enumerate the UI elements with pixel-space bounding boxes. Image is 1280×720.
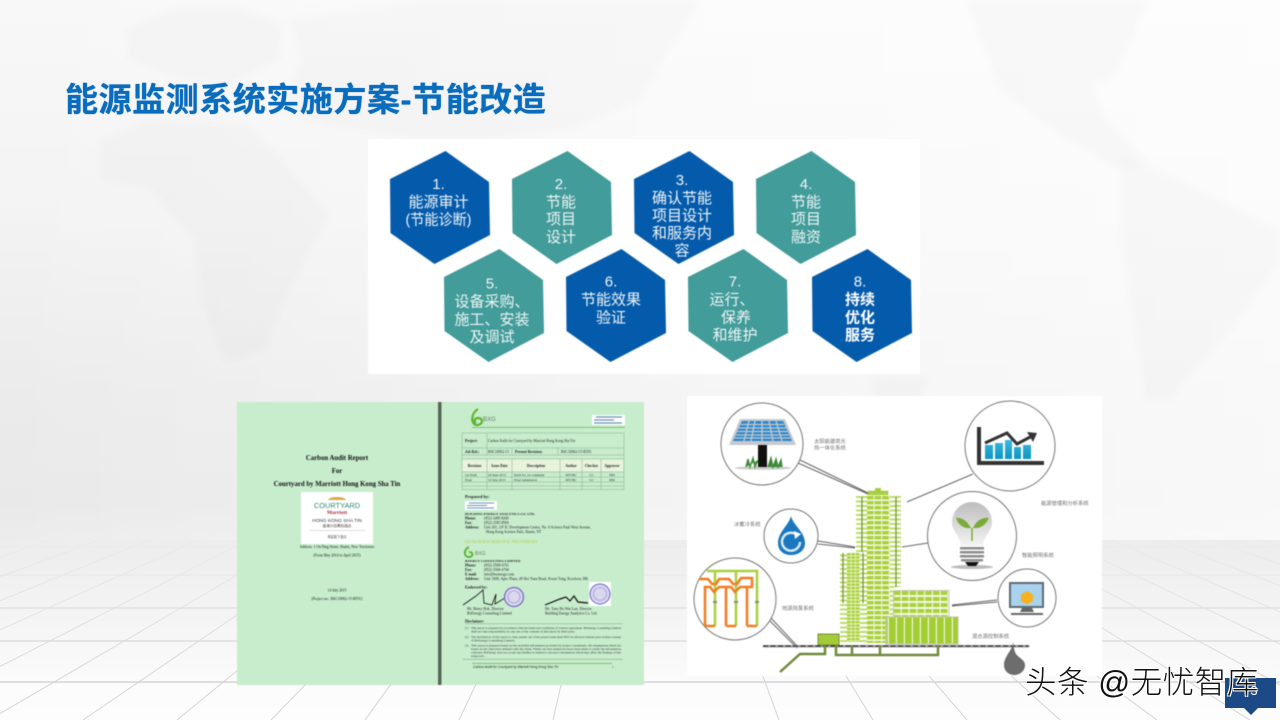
system labels: 冰蓄冷系统 <box>734 520 761 528</box>
endorsement signatures and stamps <box>463 582 611 616</box>
hotel logo: 萬豪旗下酒店 <box>327 534 347 539</box>
disclaimer text: based on the objectives defined with the client. While our best endeavors have been taken to verify the information <box>471 647 622 651</box>
report revision page <box>462 409 625 669</box>
disclaimer text: This report is prepared in accordance with the terms and conditions of contract agreement. BxEnergy Consulting Limited <box>471 626 622 630</box>
background: world map and perspective floor <box>0 306 1280 720</box>
hotel logo: HONG KONG SHA TIN <box>312 518 362 524</box>
step 2 hexagon: 节能 <box>546 194 576 211</box>
disclaimer text: This report is prepared based on the available information provided by project consultants. All assumptions listed are <box>471 644 622 648</box>
revision table: Approver <box>604 464 620 468</box>
system labels <box>734 437 1089 640</box>
disclaimer text: report. <box>471 654 486 658</box>
report page footer: Carbon Audit for Courtyard by Marriott Hong Kong Sha Tin <box>473 665 559 669</box>
revision table: Project: <box>465 439 478 443</box>
disclaimer text: collected, BxEnergy does not accept any liability in relation to incorrect information which may affect the findings of this <box>471 650 622 654</box>
step 8 hexagon: 优化 <box>845 308 875 326</box>
qualified service providers block: info@bxenergy.com <box>484 572 514 576</box>
step 7 hexagon: 保养 <box>721 310 751 326</box>
revision table: Draft for 1st comment <box>514 473 544 477</box>
step 3 hexagon: 3. <box>676 172 688 189</box>
step 7 hexagon: 运行、 <box>709 292 755 308</box>
prepared by block: BUILDING ENERGY ANALYTICS CO. LTD. <box>465 512 535 516</box>
disclaimer text: [3] <box>465 644 468 648</box>
prepared by block: Phone: <box>465 516 476 520</box>
step 5 hexagon: 5. <box>486 276 498 292</box>
step 1 hexagon: 能源审计 <box>408 194 469 211</box>
report cover page: Carbon Audit Report <box>306 455 369 462</box>
report cover page: 14 July 2015 <box>327 588 347 592</box>
step 1 hexagon: 1. <box>432 176 445 193</box>
revision table: BSC10062-15 <box>488 450 509 454</box>
step 8 hexagon <box>812 249 912 362</box>
report page footer <box>472 663 614 669</box>
qualified service providers block <box>465 539 589 582</box>
step 5 hexagon: 施工、安装 <box>454 312 530 328</box>
watermark: 头条 @无忧智库 <box>1025 664 1259 700</box>
revision table: Job Ref.: <box>465 450 479 454</box>
revision table: Issue Date <box>491 464 508 468</box>
step 6 hexagon: 6. <box>605 274 617 290</box>
BXG logo <box>472 409 496 425</box>
endorsement signatures and stamps: Building Energy Analytics Co. Ltd. <box>545 612 597 616</box>
revision table: 26 June 2015 <box>488 473 506 477</box>
icon: smart lighting bulb circle <box>928 492 1016 580</box>
connector lines <box>769 460 997 648</box>
revision table: MY/HC <box>565 478 577 482</box>
icon: solar panel circle <box>721 403 803 485</box>
step 2 hexagon: 2. <box>555 176 567 193</box>
qualified service providers block: Fax: <box>465 568 472 572</box>
endorsement signatures and stamps: Mr. Tony Ho Wai Lun, Director <box>545 607 592 612</box>
revision table: HM <box>609 473 615 477</box>
step 2 hexagon: 项目 <box>546 211 576 228</box>
step 5 hexagon <box>444 249 544 362</box>
step 6 hexagon: 验证 <box>596 310 626 326</box>
revision table: BSC10062-15-RT01 <box>561 450 592 454</box>
step 1 hexagon: (节能诊断) <box>406 212 472 228</box>
disclaimer text: Disclaimer: <box>465 620 484 624</box>
qualified service providers block: Unit 1608, Apec Plaza, 49 Hoi Yuen Road, Kwun Tong, Kowloon, HK <box>484 577 589 582</box>
prepared by block: Address: <box>465 526 479 530</box>
step 4 hexagon: 融资 <box>791 229 821 246</box>
step 7 hexagon: 和维护 <box>712 327 758 344</box>
icon: ice storage water drop circle <box>764 509 818 563</box>
disclaimer text: [2] <box>465 635 468 639</box>
step 5 hexagon: 设备采购、 <box>454 294 530 310</box>
revision table: Final submission <box>514 478 537 482</box>
disclaimer text <box>463 620 623 660</box>
endorsement signatures and stamps: Mr. Henry Hok, Director <box>467 607 505 612</box>
disclaimer text: The distribution of this report to other parties out of the project team shall NOT be allowed without prior written consent <box>471 635 621 639</box>
report cover page: (From May 2014 to April 2015) <box>313 554 361 558</box>
system labels: 混合源控制系统 <box>972 632 1010 640</box>
icon: gas flame <box>1004 642 1025 675</box>
step 2 hexagon <box>512 151 612 264</box>
qualified service providers block: Address: <box>465 577 479 581</box>
step 6 hexagon: 节能效果 <box>581 292 641 308</box>
system labels: 太阳能建筑光 <box>814 437 846 445</box>
step 3 hexagon: 容 <box>674 242 690 260</box>
revision table: 1st Draft <box>465 473 477 477</box>
step 2 hexagon: 设计 <box>546 229 576 246</box>
BXG logo: BXG <box>483 417 496 423</box>
revision table: Carbon Audit for Courtyard by Marriott Hong Kong Sha Tin <box>488 439 575 443</box>
report cover page: For <box>332 468 342 475</box>
icon: mixed source monitor circle <box>998 569 1056 627</box>
endorsement signatures and stamps: BxEnergy Consulting Limited <box>467 612 512 616</box>
report cover page: Courtyard by Marriott Hong Kong Sha Tin <box>274 481 401 488</box>
hotel logo: 香港沙田萬怡酒店 <box>323 523 352 529</box>
step 4 hexagon: 节能 <box>791 194 821 211</box>
revision table: Description <box>527 464 545 468</box>
step 8 hexagon: 服务 <box>845 326 875 344</box>
revision table: Checker <box>585 464 599 468</box>
revision table: Revision <box>468 464 481 468</box>
qualified service providers block: BXERGY CONSULTING LIMITED <box>465 559 521 563</box>
system labels: 能源管理和分析系统 <box>1041 499 1089 507</box>
step 3 hexagon: 确认节能 <box>652 190 712 207</box>
qualified service providers block: (852) 3568-4704 <box>484 568 509 572</box>
disclaimer text: shall not take responsibility for any use of the contents of this report by third party. <box>471 630 575 634</box>
prepared by block <box>465 494 591 535</box>
step 7 hexagon: 7. <box>729 274 741 290</box>
prepared by block: (852) 3585 8569 <box>484 521 509 525</box>
prepared by block: (852) 3489 8200 <box>484 516 509 520</box>
step 6 hexagon <box>566 249 666 362</box>
page number badge: 3 <box>1250 683 1258 698</box>
step 8 hexagon: 持续 <box>845 292 875 308</box>
step 5 hexagon: 及调试 <box>469 329 515 346</box>
qualified service providers block: (852) 3568-4701 <box>484 564 509 568</box>
hotel logo <box>301 492 373 544</box>
revision table: Final <box>465 478 472 482</box>
step 3 hexagon: 项目设计 <box>652 208 712 224</box>
report page footer: 1 <box>612 665 614 669</box>
prepared by block: Prepared by: <box>465 494 490 499</box>
qualified service providers block: BXG <box>475 551 486 557</box>
disclaimer text: [1] <box>465 626 468 630</box>
revision table: Present Revision: <box>515 450 542 454</box>
system labels: 地源热泵系统 <box>782 604 814 612</box>
endorsement signatures and stamps: Endorsed by: <box>465 586 487 590</box>
step 7 hexagon <box>688 249 788 362</box>
step 4 hexagon: 4. <box>800 176 812 193</box>
report cover page: [Project no.: BSC10062-15-RT01] <box>312 597 362 601</box>
qualified service providers block: Phone: <box>465 564 476 568</box>
hotel logo: Marriott <box>327 510 347 516</box>
report cover page <box>274 455 401 601</box>
prepared by block: Unit 201, 2/F IC Development Centre, No. 6 Science Park West Avenue, <box>484 526 591 530</box>
system labels: 智能照明系统 <box>1022 551 1054 559</box>
revision table: CC <box>589 478 594 482</box>
revision table: Author <box>565 464 577 468</box>
revision table: MY/HC <box>565 473 577 477</box>
hotel logo: COURTYARD <box>314 501 360 510</box>
icon: energy management chart circle <box>965 401 1055 491</box>
step 1 hexagon <box>390 151 490 264</box>
revision table: CC <box>589 473 594 477</box>
step 8 hexagon: 8. <box>854 274 866 290</box>
revision table: HM <box>609 478 615 482</box>
report cover page: Address: 1 On Ping Street, Shatin, New Territories <box>300 545 375 550</box>
disclaimer text: of BxEnergy Consulting Limited. <box>471 638 515 642</box>
revision table <box>462 433 624 490</box>
step 4 hexagon: 项目 <box>791 211 821 228</box>
title: 能源监测系统实施方案-节能改造 <box>65 81 546 118</box>
system labels: 热一体化系统 <box>814 444 846 452</box>
step 4 hexagon <box>756 151 856 264</box>
ground and underground pipes <box>763 634 1029 672</box>
qualified service providers block: QUALIFIED SERVICE PROVIDERS <box>465 539 538 544</box>
step 3 hexagon <box>634 151 734 264</box>
revision table: 14 July 2015 <box>488 478 506 482</box>
prepared by block: Fax: <box>465 521 472 525</box>
qualified service providers block: E-mail: <box>465 572 477 576</box>
prepared by block: Hong Kong Science Park, Shatin, NT <box>486 530 542 535</box>
icon: ground source pipes circle <box>694 558 776 640</box>
building complex <box>840 488 958 644</box>
step 3 hexagon: 和服务内 <box>652 225 712 242</box>
